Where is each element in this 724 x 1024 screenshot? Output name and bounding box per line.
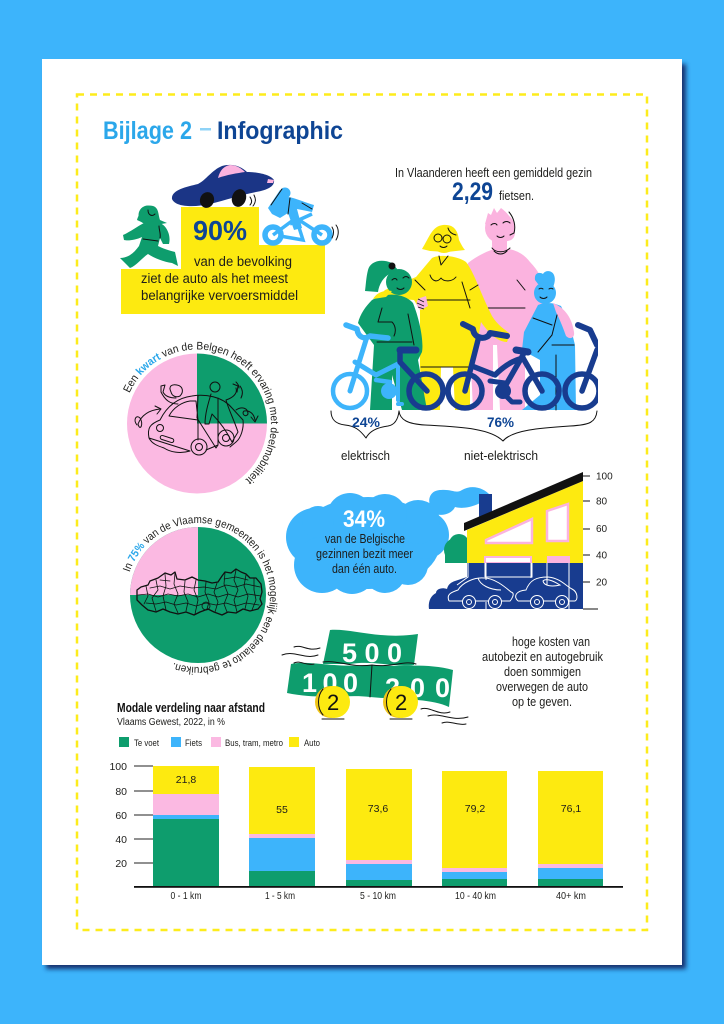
cloud [286,487,490,594]
bar 10 - 40 km: 79,2 [465,803,485,815]
pie chart [127,354,267,494]
title: Bijlage 2 [103,117,192,145]
legend: Bus, tram, metro [225,738,283,748]
bar 40+ km [538,771,603,902]
bar 5 - 10 km: 5 - 10 km [360,890,396,902]
legend [119,737,320,748]
cloud caption: gezinnen bezit meer [316,547,413,561]
costs caption: op te geven. [512,695,572,709]
icon: walking person [120,206,178,268]
bar 10 - 40 km [442,771,507,902]
icon: coins: 2 [327,690,339,715]
bar 1 - 5 km [249,767,315,902]
costs caption: autobezit en autogebruik [482,650,604,664]
panel: pie shared mobility [123,342,279,494]
icon: banknotes: 200 [385,673,450,703]
icon: house [429,472,583,609]
house scale: 80 [596,496,608,508]
bar 1 - 5 km: 55 [276,804,288,816]
bar 40+ km: 40+ km [556,890,586,902]
panel: house and cloud [286,472,613,609]
y axis [109,761,153,870]
y axis: 40 [115,834,127,846]
label elektrisch: elektrisch [341,449,390,463]
costs caption: doen sommigen [504,665,581,679]
bar 0 - 1 km: 0 - 1 km [170,890,202,902]
costs caption: overwegen de auto [496,680,588,694]
bar 0 - 1 km [153,766,219,902]
icon: coins [315,686,418,719]
legend: Fiets [185,738,202,748]
heading text [395,166,592,206]
title: Infographic [217,117,343,145]
x axis [134,886,623,888]
legend: Te voet [134,738,159,748]
person: girl green [358,261,427,410]
icon: shared car [135,382,258,455]
house scale: 20 [596,578,608,588]
person: boy blue [522,271,576,410]
y axis: 100 [109,761,127,773]
cloud caption [316,532,413,576]
bar 0 - 1 km: 21,8 [176,774,196,786]
panel: bikes per family [331,166,599,463]
costs caption [482,635,604,709]
sheet shadow [46,64,686,969]
icon: navy car [172,165,274,210]
cloud caption: van de Belgische [325,532,405,546]
panel: 90 percent podium [120,165,338,314]
heading text: fietsen. [499,189,534,203]
icon: banknotes [282,630,468,724]
y axis: 80 [115,786,127,798]
cloud caption: dan één auto. [332,562,397,576]
electric bike [333,325,402,408]
house scale: 100 [596,472,613,482]
bracket: non-electric [399,411,597,441]
statistic 90%: 90% [193,215,247,246]
house scale: 40 [596,550,608,562]
non-electric bikes [400,324,599,408]
icon: banknotes: 500 [342,638,402,668]
chart subtitle: Vlaams Gewest, 2022, in % [117,717,225,728]
person: man pink [462,208,549,410]
heading text: 2,29 [452,178,493,206]
curved caption: In 75% van de Vlaamse gemeenten is het mogelijk een deelauto te gebruiken. [122,517,278,675]
y axis: 60 [115,810,127,822]
chart title: Modale verdeling naar afstand [117,701,265,715]
title [103,117,343,145]
statistic 76%: 76% [487,414,515,430]
bar 10 - 40 km: 10 - 40 km [455,890,496,902]
white sheet [42,59,682,965]
icon: cyclist [265,188,338,243]
curved caption: Een kwart van de Belgen heeft ervaring met deelmobiliteit [123,342,279,484]
house scale: 60 [596,524,608,535]
label niet-elektrisch: niet-elektrisch [464,449,538,463]
person: woman yellow [378,225,510,410]
caption: ziet de auto als het meest [141,271,288,286]
caption [141,254,298,303]
bar 40+ km: 76,1 [561,803,581,815]
statistic 24%: 24% [352,414,381,430]
icon: bicycles [333,324,599,408]
bracket: electric [331,411,399,438]
bar 5 - 10 km: 73,6 [368,803,388,815]
legend: Auto [304,738,320,748]
caption: van de bevolking [194,254,292,269]
dashed border [77,94,647,930]
icon: coins: 2 [395,690,407,715]
statistic 34%: 34% [343,506,385,533]
house scale [583,472,613,609]
icon: banknotes: 100 [302,668,358,698]
y axis: 20 [115,858,127,870]
costs caption: hoge kosten van [512,635,590,649]
pie chart [130,527,266,663]
caption: belangrijke vervoersmiddel [141,288,298,303]
bar 5 - 10 km [346,769,412,902]
bar 1 - 5 km: 1 - 5 km [265,890,295,902]
panel: modal split chart [109,701,623,902]
panel: pie shared car municipalities [122,517,278,675]
yellow podium [121,207,325,314]
map of Flanders [137,569,262,615]
heading text: In Vlaanderen heeft een gemiddeld gezin [395,166,592,180]
panel: costs [282,630,604,724]
